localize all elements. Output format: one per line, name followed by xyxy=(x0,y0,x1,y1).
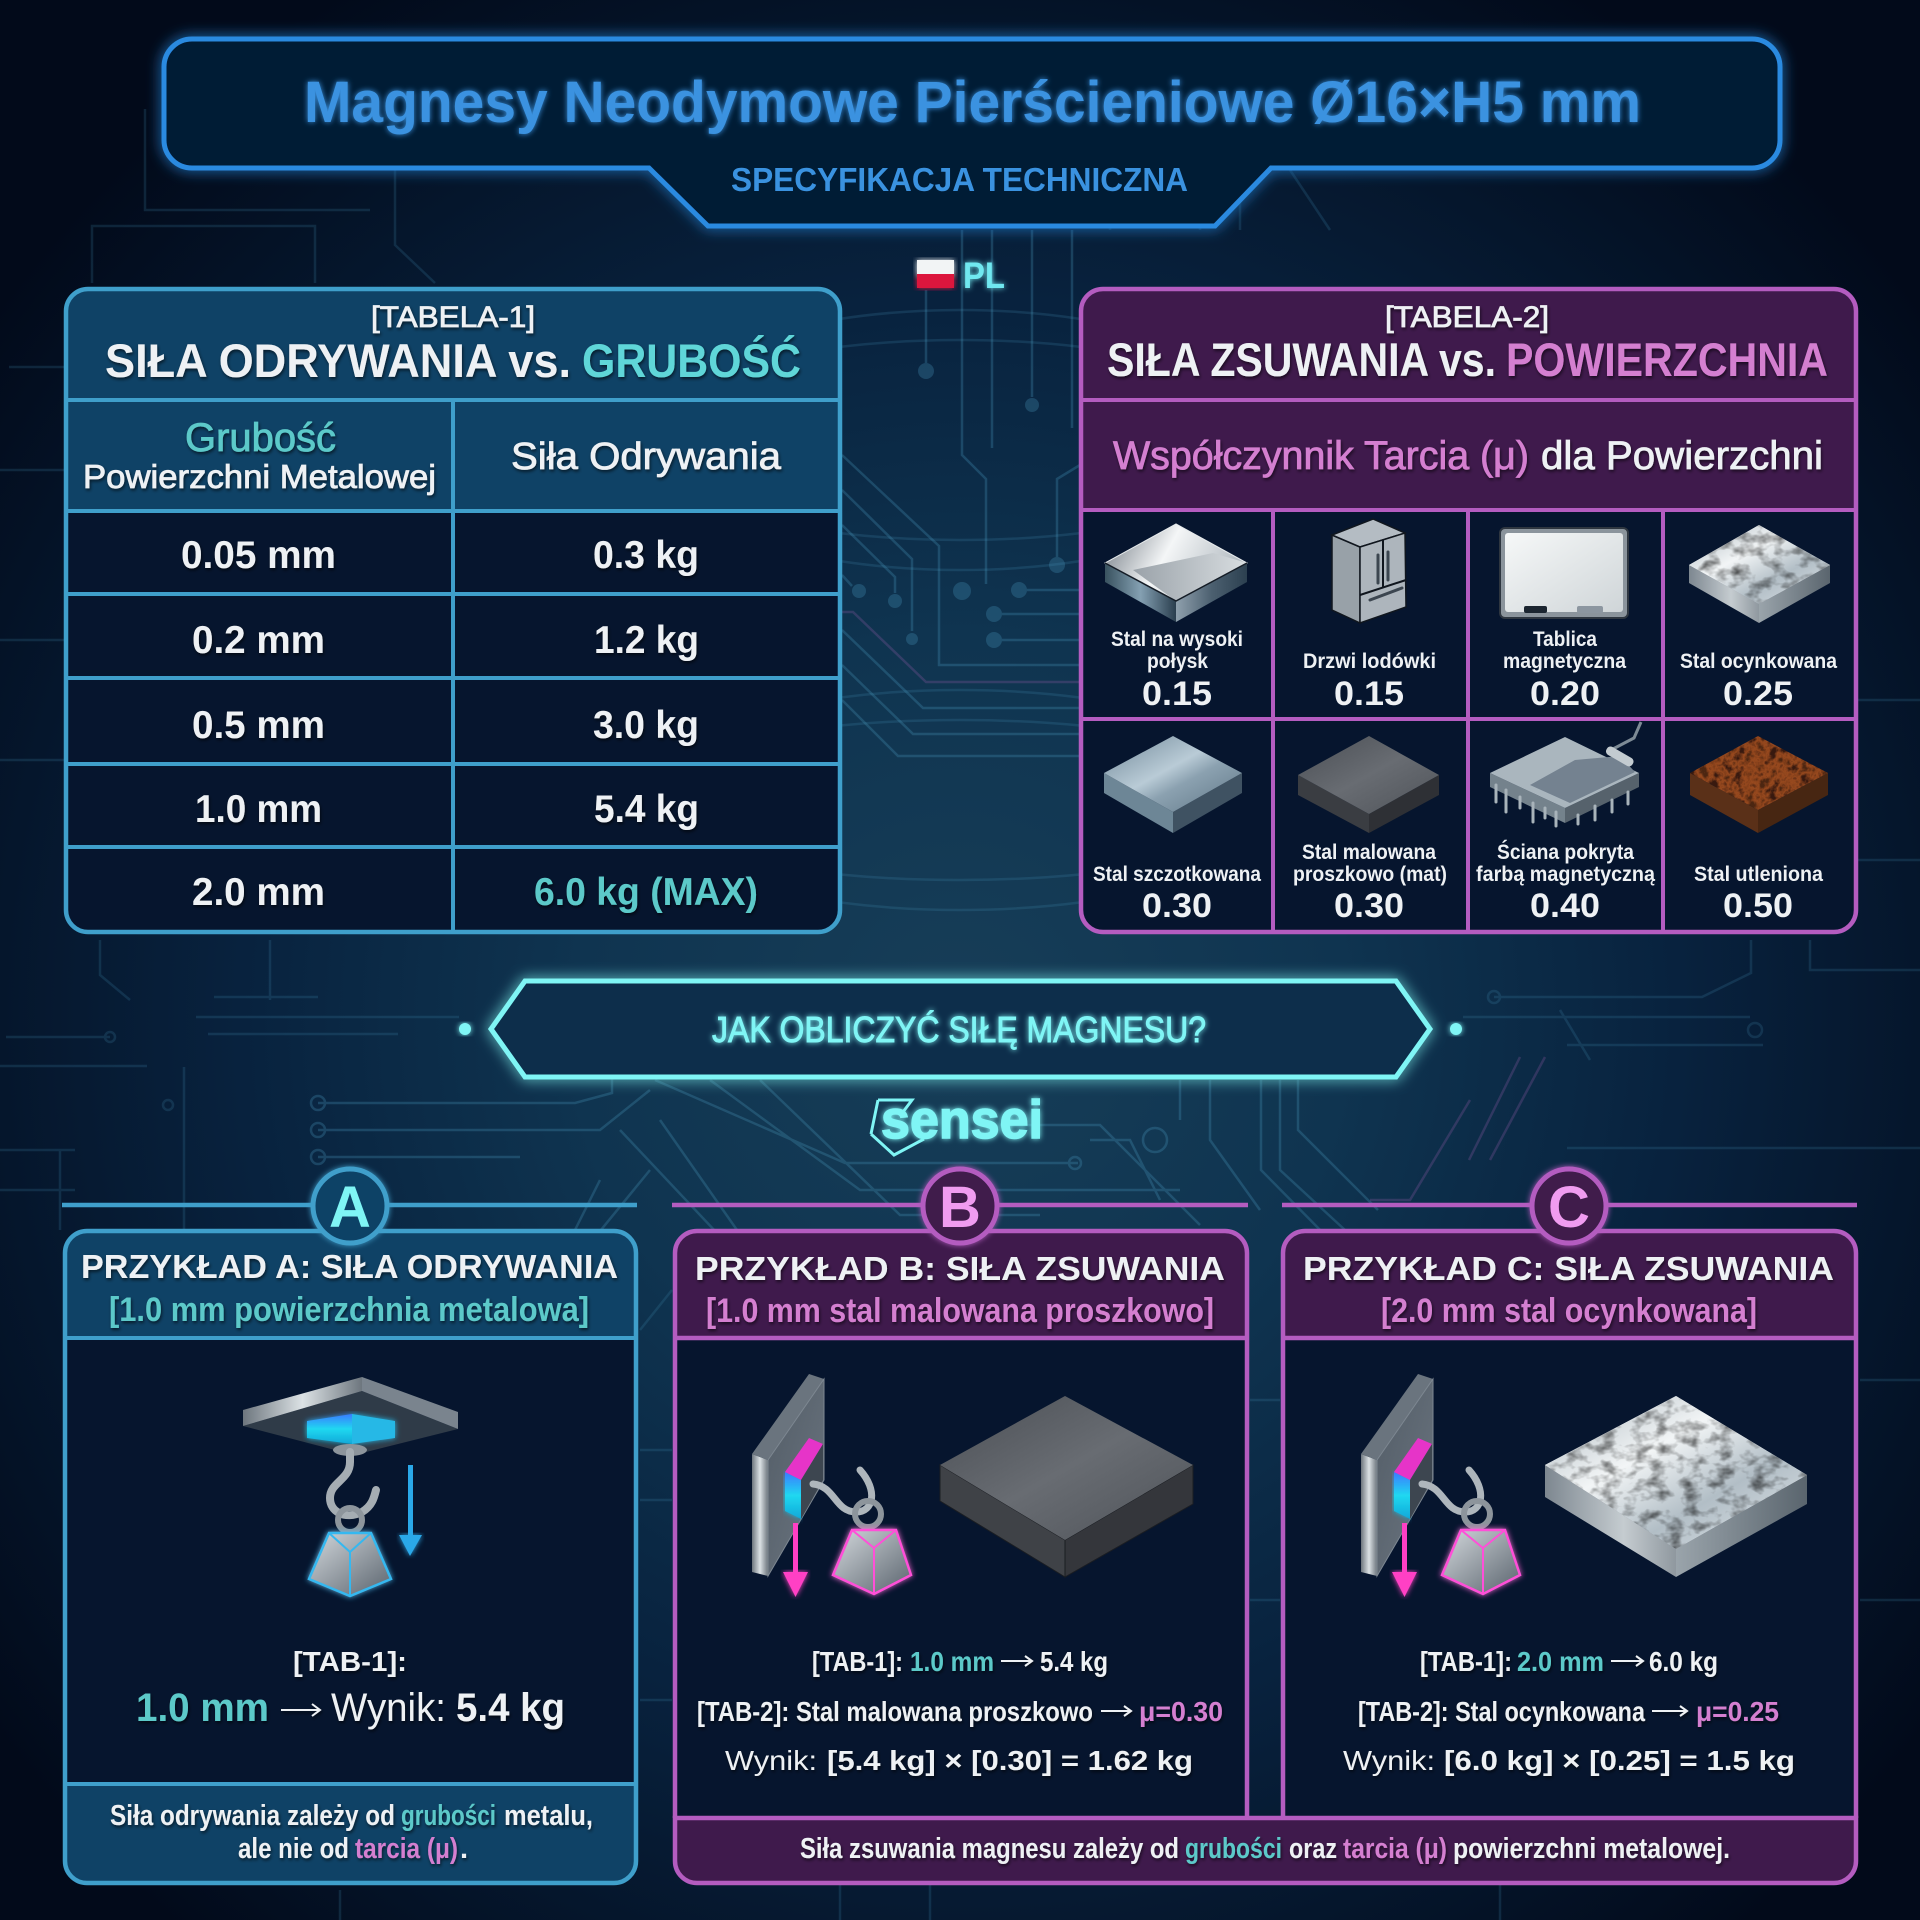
table 2 heading xyxy=(1107,301,1828,478)
surface: galvanized steel: 0.25 xyxy=(1723,675,1793,713)
language tag: Polish flag and PL xyxy=(917,255,1005,296)
shared footer band for examples B and C xyxy=(675,1818,1856,1883)
example B calculation: 5.4 kg xyxy=(1040,1646,1108,1677)
table 1 rows: 0.2 mm xyxy=(192,619,325,662)
footer note: grubości xyxy=(1185,1833,1282,1865)
plate: powder coated steel xyxy=(940,1396,1193,1577)
surface: galvanized steel xyxy=(1680,525,1837,713)
surface: oxidized steel: Stal utleniona xyxy=(1694,863,1823,886)
table 1 grid xyxy=(66,400,840,932)
surface: fridge door: Drzwi lodówki xyxy=(1303,650,1436,673)
surface: magnetic whiteboard: 0.20 xyxy=(1530,675,1600,713)
surface: brushed steel: Stal szczotkowana xyxy=(1093,863,1261,886)
title frame xyxy=(164,39,1780,226)
surface: oxidized steel: 0.50 xyxy=(1723,887,1793,925)
example A note: . xyxy=(460,1833,468,1865)
example C heading: [2.0 mm stal ocynkowana] xyxy=(1381,1292,1757,1330)
example A calculation: 5.4 kg xyxy=(456,1686,565,1730)
subtitle: SPECYFIKACJA TECHNICZNA xyxy=(731,161,1188,198)
surface: powder coated steel: Stal malowana xyxy=(1302,841,1436,864)
example B calculation: [5.4 kg] × [0.30] = 1.62 kg xyxy=(827,1745,1193,1776)
table 1 rows: 5.4 kg xyxy=(594,788,699,831)
panel: example B xyxy=(675,1231,1247,1818)
example A note: metalu, xyxy=(504,1800,593,1832)
icon: magnet pulling weight from ceiling plate xyxy=(243,1377,458,1596)
surface: magnetic paint wall: 0.40 xyxy=(1530,887,1600,925)
surface: magnetic paint wall xyxy=(1476,722,1655,925)
example B calculation: Wynik: xyxy=(725,1745,817,1776)
separator lines above examples xyxy=(62,1203,1857,1207)
example A note: Siła odrywania zależy od xyxy=(110,1800,395,1832)
surface: powder coated steel: proszkowo (mat) xyxy=(1293,863,1447,886)
example C calculation: 2.0 mm xyxy=(1517,1646,1604,1677)
badge: A xyxy=(313,1169,387,1243)
table 2 grid xyxy=(1081,400,1856,932)
surface: magnetic whiteboard xyxy=(1500,528,1628,713)
example C calculation: μ=0.25 xyxy=(1696,1696,1779,1727)
table 1 rows: 0.5 mm xyxy=(192,704,325,747)
icon: magnet sliding on wall with weight xyxy=(1361,1374,1520,1597)
table 1 rows: 1.0 mm xyxy=(195,788,322,831)
example A calculation: Wynik: xyxy=(331,1686,446,1730)
title: Magnesy Neodymowe Pierścieniowe Ø16×H5 mm xyxy=(304,70,1641,135)
table 2 heading: SIŁA ZSUWANIA vs. xyxy=(1107,333,1496,386)
example B calculation xyxy=(697,1646,1223,1776)
table 1 heading: GRUBOŚĆ xyxy=(582,334,801,387)
table 1 rows: 6.0 kg (MAX) xyxy=(534,871,758,914)
badge: C: C xyxy=(1548,1175,1590,1240)
surface: fridge door xyxy=(1303,519,1436,713)
surface: powder coated steel: 0.30 xyxy=(1334,887,1404,925)
example A note: grubości xyxy=(401,1800,496,1832)
surface: brushed steel: 0.30 xyxy=(1142,887,1212,925)
example B calculation: [TAB-1]: xyxy=(812,1646,903,1677)
banner dots xyxy=(459,1023,1462,1035)
surface: oxidized steel xyxy=(1690,736,1828,925)
example C heading: PRZYKŁAD C: SIŁA ZSUWANIA xyxy=(1303,1250,1834,1287)
table 1 heading: [TABELA-1] xyxy=(371,301,535,334)
footer note: Siła zsuwania magnesu zależy od xyxy=(800,1833,1179,1865)
table 2 heading: dla Powierzchni xyxy=(1541,434,1823,478)
table 2 heading: Współczynnik Tarcia (μ) xyxy=(1113,434,1529,478)
surface: magnetic whiteboard: Tablica xyxy=(1533,628,1597,651)
table 2 heading: [TABELA-2] xyxy=(1385,301,1549,334)
table 2 heading: POWIERZCHNIA xyxy=(1506,333,1828,386)
example C calculation xyxy=(1343,1646,1795,1776)
table 1 heading: Grubość xyxy=(185,416,336,460)
footer note: tarcia (μ) xyxy=(1343,1833,1447,1865)
banner frame xyxy=(491,981,1430,1077)
panel: table 1 xyxy=(66,289,840,932)
badge: C xyxy=(1532,1169,1606,1243)
example A note: ale nie od xyxy=(238,1833,349,1865)
badge: B xyxy=(923,1169,997,1243)
section banner: how to calculate xyxy=(459,981,1462,1077)
footer note: oraz xyxy=(1289,1833,1337,1865)
example A heading xyxy=(81,1248,618,1329)
surface: brushed steel xyxy=(1093,736,1261,925)
example A heading: PRZYKŁAD A: SIŁA ODRYWANIA xyxy=(81,1248,618,1285)
surface: polished steel: Stal na wysoki xyxy=(1111,628,1243,651)
example B heading: PRZYKŁAD B: SIŁA ZSUWANIA xyxy=(695,1250,1225,1287)
example A heading: [1.0 mm powierzchnia metalowa] xyxy=(109,1291,589,1329)
example B calculation: [TAB-2]: Stal malowana proszkowo xyxy=(697,1696,1093,1727)
plate: galvanized steel xyxy=(1545,1396,1807,1577)
surface: magnetic whiteboard: magnetyczna xyxy=(1503,650,1626,673)
badge: A: A xyxy=(329,1175,371,1240)
table 1 rows: 0.3 kg xyxy=(593,534,699,577)
example C calculation: [6.0 kg] × [0.25] = 1.5 kg xyxy=(1444,1745,1795,1776)
example A calculation: [TAB-1]: xyxy=(293,1646,407,1677)
table 1 rows xyxy=(181,534,758,914)
panel: example A xyxy=(65,1231,636,1883)
surface: polished steel xyxy=(1105,524,1247,713)
surface: magnetic paint wall: Ściana pokryta xyxy=(1497,840,1634,864)
table 1 heading: Siła Odrywania xyxy=(511,436,782,478)
example C calculation: 6.0 kg xyxy=(1649,1646,1718,1677)
table 1 rows: 1.2 kg xyxy=(594,619,699,662)
panel: table 2 xyxy=(1081,289,1856,932)
example A note xyxy=(110,1800,593,1865)
icon: magnet sliding on wall with weight xyxy=(752,1374,911,1597)
example B heading: [1.0 mm stal malowana proszkowo] xyxy=(706,1292,1214,1330)
example C calculation: Wynik: xyxy=(1343,1745,1435,1776)
panel: example C xyxy=(1283,1231,1856,1818)
title banner xyxy=(164,39,1780,226)
surface: powder coated steel xyxy=(1293,736,1447,925)
table 1 heading xyxy=(83,301,801,495)
surface: fridge door: 0.15 xyxy=(1334,675,1404,713)
example C calculation: [TAB-2]: Stal ocynkowana xyxy=(1358,1696,1645,1727)
logo: sensei: sensei xyxy=(881,1090,1043,1150)
example C calculation: [TAB-1]: xyxy=(1420,1646,1512,1677)
example A calculation xyxy=(136,1646,565,1730)
surface: polished steel: połysk xyxy=(1147,650,1208,673)
table 1 rows: 0.05 mm xyxy=(181,534,336,577)
table 1 rows: 2.0 mm xyxy=(192,871,325,914)
example B heading xyxy=(695,1250,1225,1330)
table 1 rows: 3.0 kg xyxy=(593,704,699,747)
language tag: Polish flag and PL: PL xyxy=(963,255,1005,296)
table 1 heading: Powierzchni Metalowej xyxy=(83,458,436,495)
example A calculation: 1.0 mm xyxy=(136,1686,269,1730)
footer note: powierzchni metalowej. xyxy=(1453,1833,1730,1865)
example A note: tarcia (μ) xyxy=(355,1833,458,1865)
example B calculation: μ=0.30 xyxy=(1139,1696,1223,1727)
banner text: JAK OBLICZYĆ SIŁĘ MAGNESU? xyxy=(712,1009,1206,1050)
surface: galvanized steel: Stal ocynkowana xyxy=(1680,650,1837,673)
footer note xyxy=(800,1833,1730,1865)
example B calculation: 1.0 mm xyxy=(910,1646,994,1677)
example C heading xyxy=(1303,1250,1834,1330)
surface: polished steel: 0.15 xyxy=(1142,675,1212,713)
table 1 heading: SIŁA ODRYWANIA vs. xyxy=(105,334,571,387)
surface: magnetic paint wall: farbą magnetyczną xyxy=(1476,863,1655,886)
badge: B: B xyxy=(939,1175,981,1240)
